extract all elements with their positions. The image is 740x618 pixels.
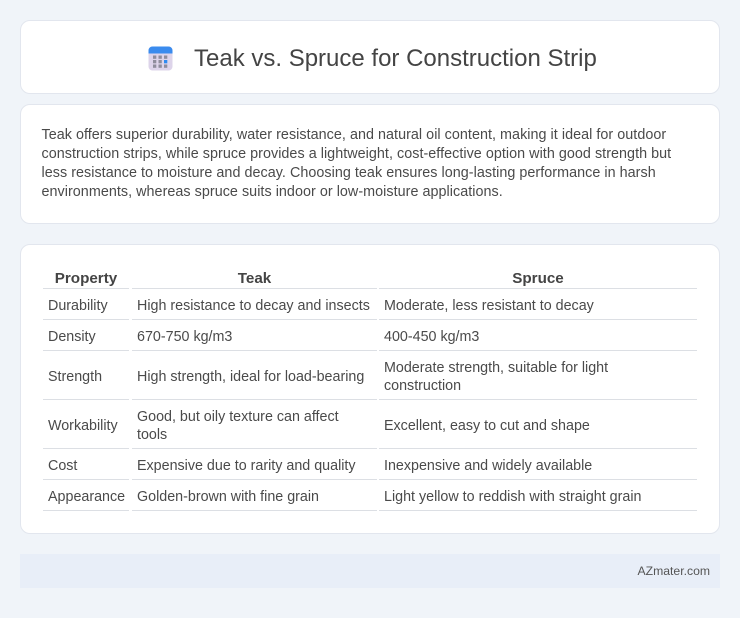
row: density (48, 329, 479, 345)
row: appearance: Golden-brown with fine grain (137, 489, 319, 505)
summary text (42, 127, 671, 200)
row: cost: Inexpensive and widely available (384, 458, 592, 474)
row: cost: Cost (48, 458, 77, 474)
row: appearance: Appearance (48, 489, 125, 505)
table header: Spruce (512, 270, 564, 287)
row: appearance (48, 489, 641, 505)
summary text: environments, whereas spruce suits indoor or low-moisture applications. (42, 184, 503, 200)
row: strength (48, 360, 608, 394)
table header (55, 270, 564, 287)
footer bar (20, 554, 720, 588)
row: cost: Expensive due to rarity and quality (137, 458, 356, 474)
row: workability (48, 409, 590, 443)
row: durability: Durability (48, 298, 108, 314)
table (43, 270, 697, 511)
row: appearance: Light yellow to reddish with straight grain (384, 489, 641, 505)
panel: comparison table (20, 244, 720, 534)
panel: title card (20, 20, 720, 94)
summary text: less resistance to moisture and decay. Choosing teak ensures long-lasting performance in harsh (42, 165, 656, 181)
icon: calendar (148, 46, 172, 70)
row: durability: High resistance to decay and insects (137, 298, 370, 314)
row: workability: Excellent, easy to cut and shape (384, 418, 590, 434)
footer credit: AZmater.com (638, 564, 710, 578)
row: strength: construction (384, 378, 461, 394)
row: durability: Moderate, less resistant to decay (384, 298, 594, 314)
row: strength: High strength, ideal for load-bearing (137, 369, 364, 385)
title: Teak vs. Spruce for Construction Strip (194, 45, 597, 72)
table header: Teak (238, 270, 271, 287)
table header: Property (55, 270, 117, 287)
row: strength: Strength (48, 369, 102, 385)
row: durability (48, 298, 594, 314)
row: workability: tools (137, 427, 167, 443)
row: cost (48, 458, 592, 474)
summary text: Teak offers superior durability, water resistance, and natural oil content, making it ideal for outdoor (42, 127, 666, 143)
row: workability: Workability (48, 418, 118, 434)
row: density: 400-450 kg/m3 (384, 329, 479, 345)
row: workability: Good, but oily texture can affect (137, 409, 339, 425)
row: density: Density (48, 329, 96, 345)
row: strength: Moderate strength, suitable for light (384, 360, 608, 376)
panel: summary (20, 104, 720, 224)
row: density: 670-750 kg/m3 (137, 329, 232, 345)
summary text: construction strips, while spruce provides a lightweight, cost-effective option with good strength but (42, 146, 671, 162)
